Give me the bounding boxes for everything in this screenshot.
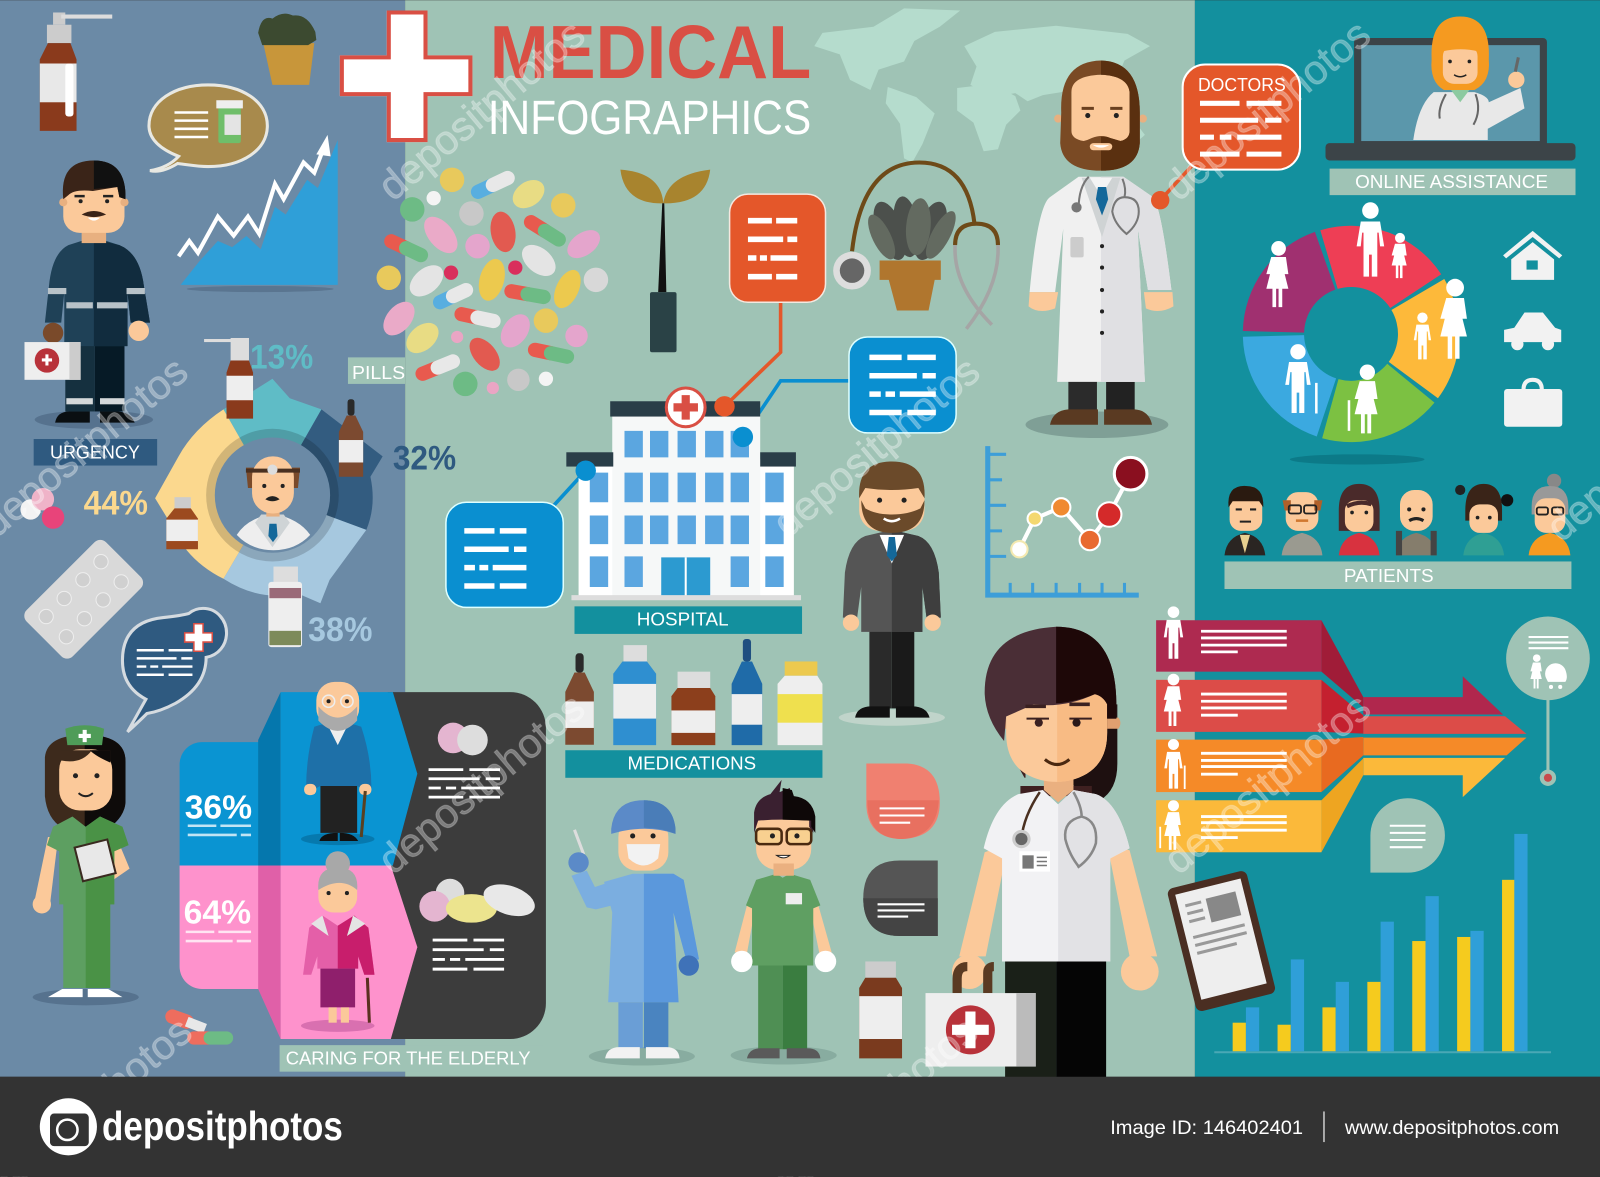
callout: doctors xyxy=(1151,65,1300,209)
panel: footer bar xyxy=(0,1077,1600,1177)
icon: small pills xyxy=(20,488,64,529)
label: pills: PILLS xyxy=(352,362,405,383)
icon: donut pill jar xyxy=(268,567,302,647)
panel: caring for the elderly xyxy=(180,682,546,1039)
icon: suitcase xyxy=(1504,380,1562,427)
person: doctor with beard xyxy=(1026,60,1173,438)
icon: donut spray bottle xyxy=(204,338,253,419)
panel: centre background xyxy=(405,0,1195,1077)
watermarks: depositphotos xyxy=(1155,684,1379,883)
icon: house xyxy=(1503,231,1562,280)
icon: hospital cross xyxy=(666,388,705,427)
label: urgency xyxy=(34,439,157,466)
callout: orange xyxy=(730,194,826,302)
chart: bars xyxy=(1214,834,1551,1052)
speech bubble: medicine xyxy=(149,85,267,171)
label: patients xyxy=(1224,561,1571,589)
arrows xyxy=(1363,676,1527,797)
icon: mother and child xyxy=(1414,279,1467,359)
chart: line graph xyxy=(988,446,1147,595)
watermarks: depositphotos xyxy=(369,684,593,883)
label: hospital xyxy=(574,606,802,634)
medications row xyxy=(565,639,822,745)
icon: ribbon figure 1 xyxy=(1164,606,1183,659)
icon: donut dropper bottle xyxy=(339,399,363,477)
icon: tablet xyxy=(1167,870,1276,1012)
portrait 4 xyxy=(1396,490,1437,555)
text lines under percents xyxy=(186,826,251,941)
icon: brown jar xyxy=(671,672,715,745)
portrait 2 xyxy=(1282,492,1322,555)
connector lines xyxy=(552,161,1196,507)
title: MEDICAL xyxy=(490,11,811,95)
panel: right background xyxy=(1195,0,1600,1077)
icon: ribbon figure 2 xyxy=(1164,674,1181,726)
world map xyxy=(814,8,1150,162)
label: medications: MEDICATIONS xyxy=(628,753,756,774)
icon: camera logo xyxy=(40,1098,97,1155)
icon: title cross xyxy=(340,10,472,142)
speech bubble: plus xyxy=(122,608,227,732)
chart: doctor donut xyxy=(155,379,383,603)
icon: grandmother xyxy=(1349,365,1378,433)
percent labels: 13% xyxy=(250,339,313,377)
callout: blue left xyxy=(446,502,563,607)
label: hospital: HOSPITAL xyxy=(637,609,729,630)
person: scrub man xyxy=(731,780,837,1065)
icon: stethoscope and plant xyxy=(833,162,998,329)
icon: potted plant xyxy=(258,14,316,85)
text lines bottom xyxy=(433,940,504,969)
pills cluster xyxy=(377,168,608,396)
portrait 6 xyxy=(1529,474,1570,555)
percent labels: 44% xyxy=(84,485,148,523)
percent: 36: 36% xyxy=(185,790,252,827)
person: old man xyxy=(301,682,374,845)
text lines top xyxy=(429,770,500,797)
percent labels xyxy=(84,339,456,649)
portrait 1 xyxy=(1224,486,1265,555)
chart: growth area with arrow xyxy=(179,135,338,292)
watermarks: depositphotos xyxy=(1155,11,1379,209)
icon: dropper brown xyxy=(565,653,594,745)
icon: ribbon figure 4 xyxy=(1160,800,1181,850)
watermarks: depositphotos xyxy=(764,347,988,546)
icon: woman xyxy=(1266,241,1288,307)
percent labels: 38% xyxy=(308,611,372,649)
percent: 64: 64% xyxy=(184,895,251,932)
icon: yellow bottle xyxy=(778,661,822,745)
icon: blister pack xyxy=(21,536,146,662)
callout: green circle xyxy=(1370,798,1445,873)
icon: spray bottle xyxy=(40,12,112,131)
icon: car xyxy=(1504,312,1561,350)
person: surgeon xyxy=(568,800,699,1066)
icon: blue bottle xyxy=(613,645,656,745)
callout: blue right xyxy=(849,337,956,433)
icon: pills top xyxy=(438,723,488,755)
title: INFOGRAPHICS xyxy=(488,92,811,145)
icon: sprout xyxy=(620,170,710,352)
icon: bottle xyxy=(859,961,902,1058)
label: patients: PATIENTS xyxy=(1344,565,1434,586)
person: old woman xyxy=(301,851,374,1032)
person: nurse with clipboard xyxy=(33,725,139,1005)
callout: dark xyxy=(863,860,938,936)
callout: salmon xyxy=(866,764,940,839)
icon: online assistance laptop xyxy=(1326,17,1576,160)
icon: capsules xyxy=(172,1017,227,1038)
patient portraits xyxy=(1224,474,1570,555)
ribbons chart xyxy=(1156,606,1527,852)
label: online assistance: ONLINE ASSISTANCE xyxy=(1355,171,1548,192)
callout: doctors: DOCTORS xyxy=(1198,74,1286,95)
icon: donut jar xyxy=(166,497,198,549)
person: man in suit xyxy=(839,461,945,726)
label: urgency: URGENCY xyxy=(50,441,140,462)
callout: pram circle xyxy=(1506,617,1590,786)
portrait: doctor xyxy=(237,456,310,550)
chart: patients donut xyxy=(1243,202,1467,465)
label: pills xyxy=(348,357,405,384)
percent labels: 32% xyxy=(393,440,456,478)
label: online assistance xyxy=(1330,169,1576,195)
icon: medical case xyxy=(926,967,1036,1067)
watermarks: depositphotos xyxy=(369,11,593,209)
person: large doctor woman xyxy=(926,627,1159,1082)
title xyxy=(488,11,811,145)
portrait 3 xyxy=(1339,484,1380,555)
portrait 5 xyxy=(1455,484,1513,555)
icon: ribbon figure 3 xyxy=(1164,739,1185,789)
icon: blue dropper xyxy=(732,639,762,745)
brand name: depositphotos xyxy=(102,1103,343,1149)
icon: adult and child xyxy=(1357,202,1407,278)
website: www.depositphotos.com xyxy=(1344,1117,1559,1139)
panel: left background xyxy=(0,0,405,1077)
label: medications xyxy=(565,750,822,778)
label: caring for the elderly: CARING FOR THE ELDERLY xyxy=(286,1048,531,1069)
icon: grandfather xyxy=(1285,344,1316,414)
hospital xyxy=(566,388,801,600)
person: paramedic xyxy=(24,160,153,429)
image id: Image ID: 146402401 xyxy=(1110,1117,1303,1139)
icon: pills bottom xyxy=(419,878,539,923)
